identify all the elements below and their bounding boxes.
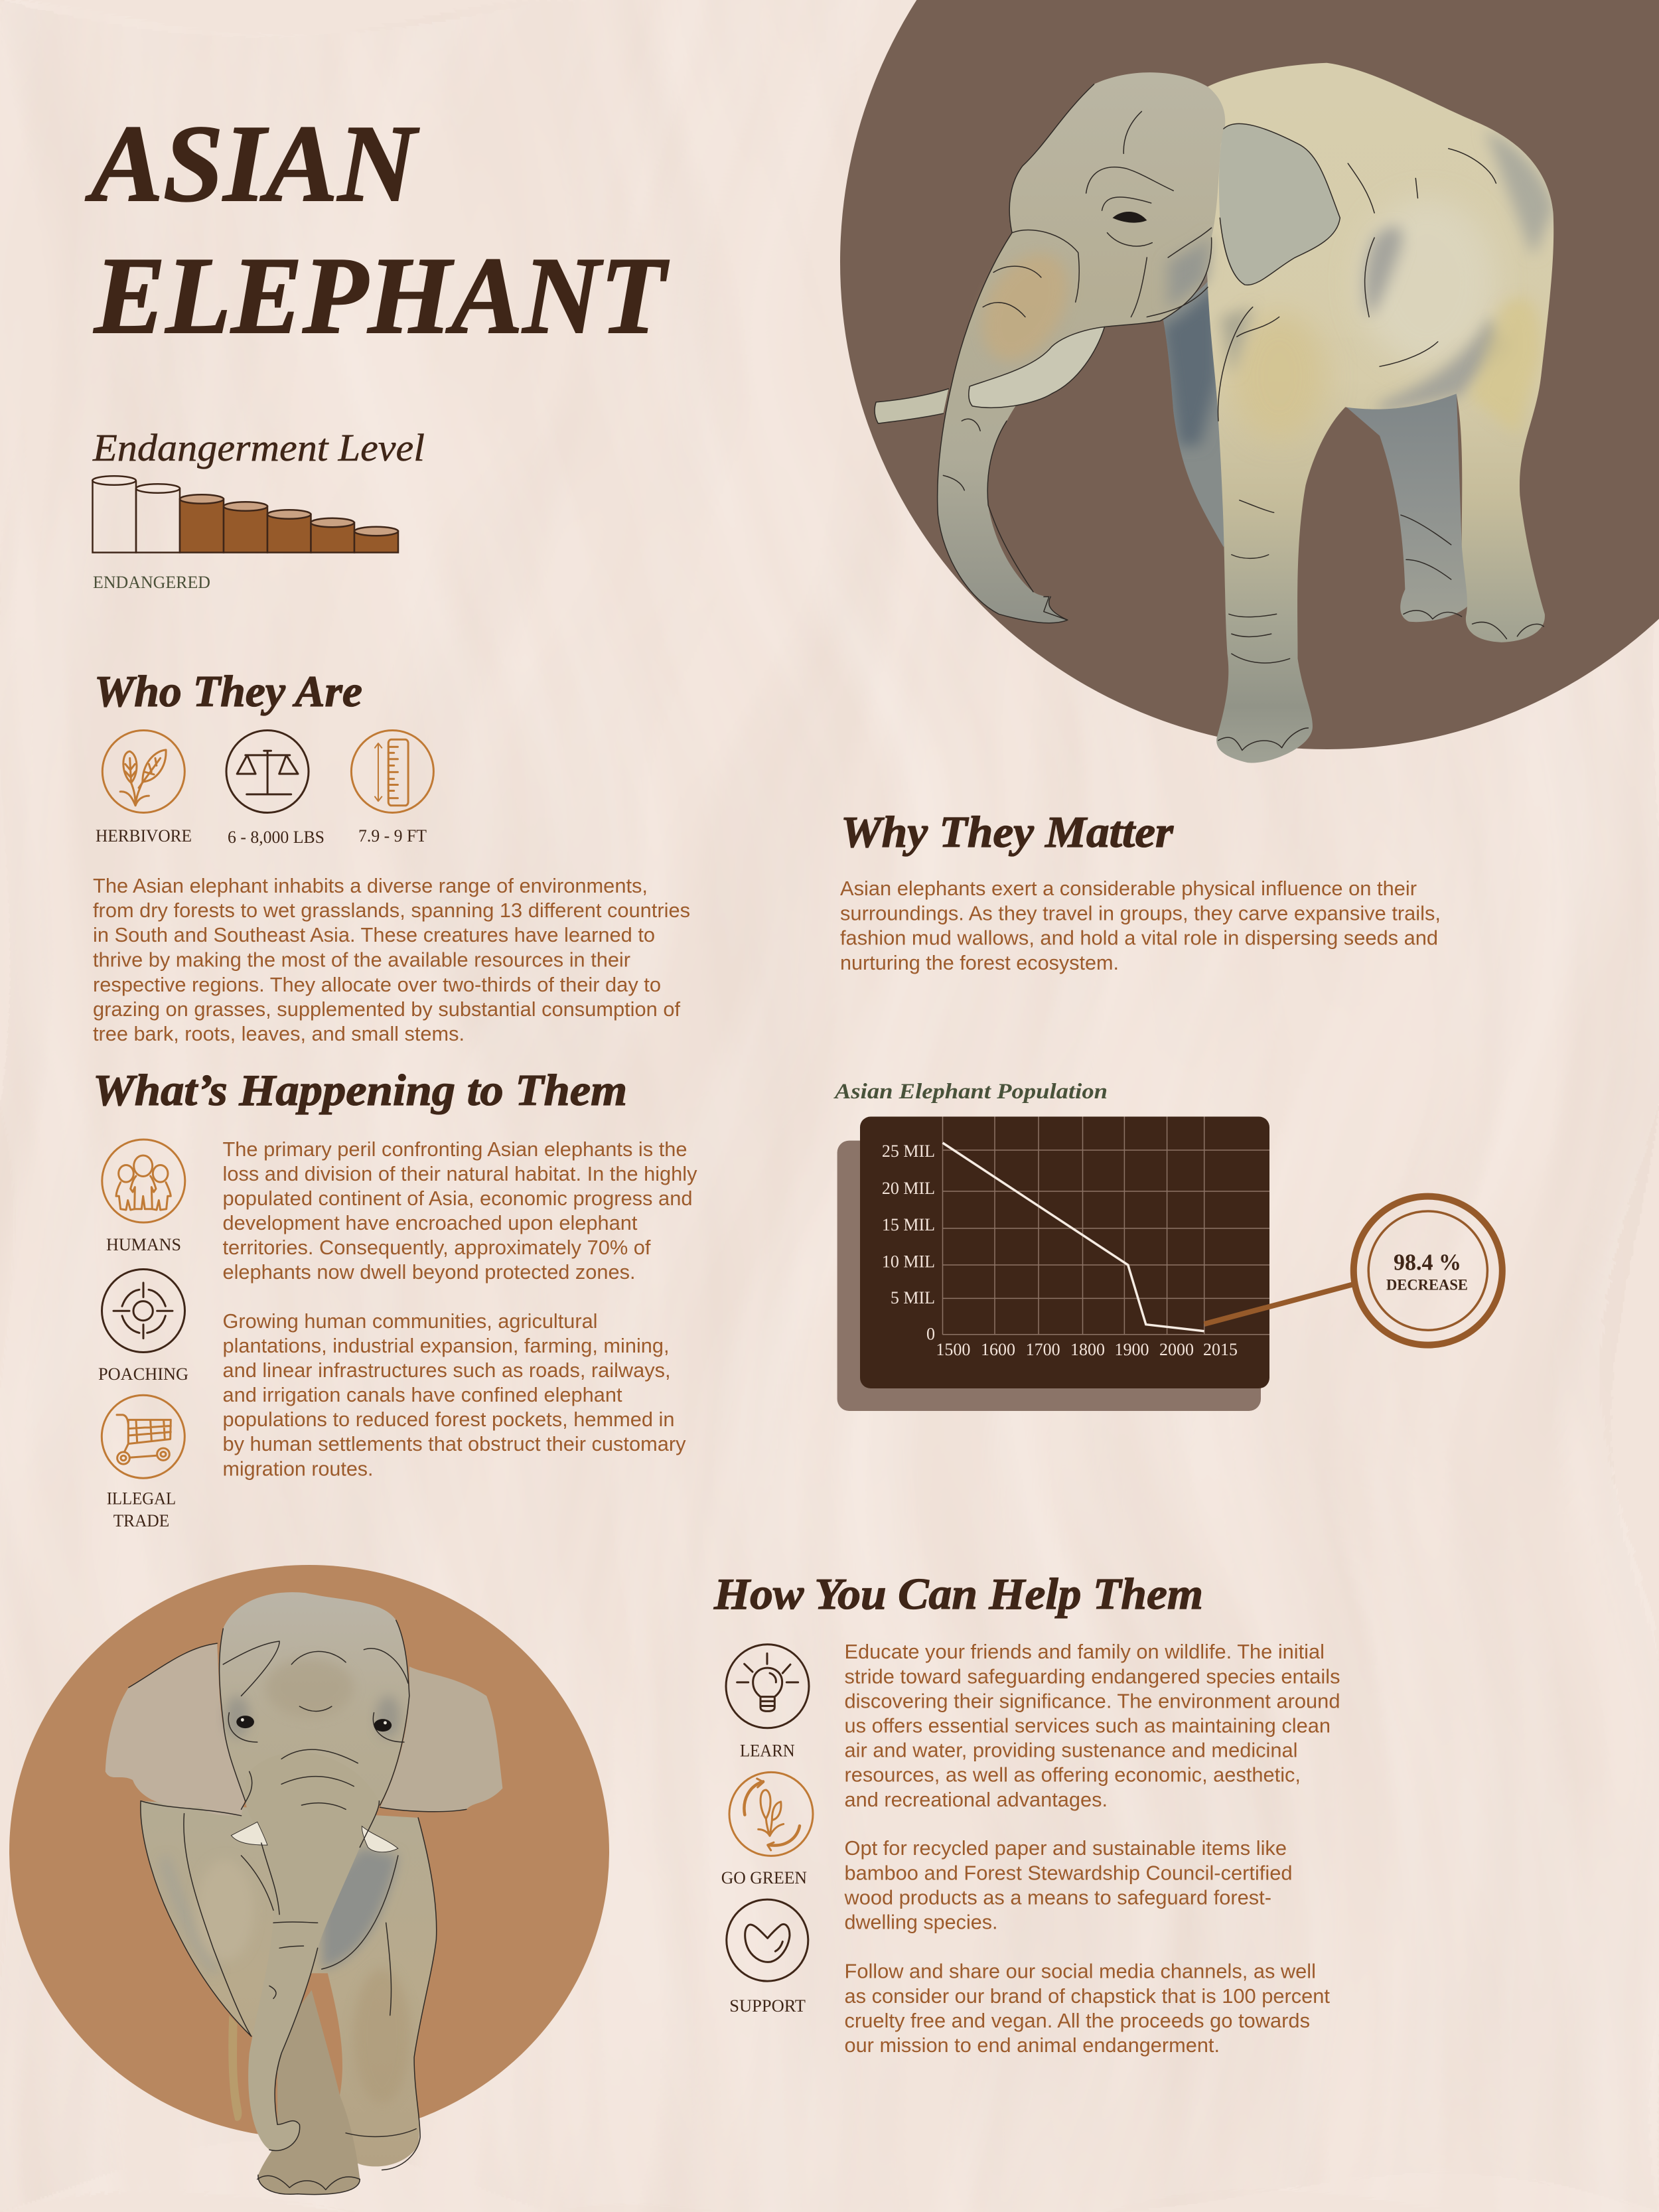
text: who they are body: thrive by making the most of the available resources in their [93,948,630,972]
text: who they are body: in South and Southeast Asia. These creatures have learned to [93,923,655,946]
text: why they matter body: fashion mud wallows, and hold a vital role in dispersing seeds and [840,926,1438,949]
y axis labels [882,1142,935,1344]
label: support: SUPPORT [729,1996,806,2016]
label: learn: LEARN [740,1741,795,1760]
label: herbivore: HERBIVORE [96,826,192,846]
text: what's happening body: populations to reduced forest pockets, hemmed in [223,1408,674,1431]
callout: 98.4% decrease: DECREASE [1386,1277,1468,1293]
title [85,102,669,356]
panel: endangerment level [92,426,425,592]
callout: 98.4% decrease: 98.4 % [1394,1250,1461,1276]
circle: lower elephant backdrop [9,1565,609,2138]
text: why they matter body: nurturing the forest ecosystem. [840,951,1119,974]
x axis labels: 1700 [1026,1340,1060,1359]
text: how you can help body: Follow and share our social media channels, as well [844,1959,1316,1983]
text: what's happening body: The primary peril confronting Asian elephants is the [223,1138,687,1161]
label: humans: HUMANS [106,1235,181,1254]
icon: ruler height [351,730,433,812]
panel: who they are [93,667,690,1045]
title: ASIAN [85,102,419,224]
text: who they are body: respective regions. They allocate over two-thirds of their day to [93,973,661,996]
panel: how you can help them [713,1570,1340,2057]
text: what's happening body: populated continent of Asia, economic progress and [223,1187,693,1210]
y axis labels: 15 MIL [882,1215,935,1234]
text: how you can help body: discovering their significance. The environment around [844,1690,1340,1712]
chart: declining cylinders [92,476,398,552]
text: why they matter body: Asian elephants exert a considerable physical influence on their [840,877,1417,900]
label: poaching: POACHING [98,1364,188,1384]
icon: heart support [727,1899,808,1981]
icon: go green [729,1772,813,1856]
y axis labels: 10 MIL [882,1252,935,1272]
text: what's happening body: by human settlements that obstruct their customary [223,1432,686,1455]
text: how you can help body: resources, as well as offering economic, aesthetic, [844,1763,1301,1787]
heading: Who They Are [94,667,362,716]
x axis labels: 2015 [1203,1340,1238,1359]
text: what's happening body: development have encroached upon elephant [223,1211,638,1234]
text: how you can help body [844,1640,1340,2057]
illustration: front-facing elephant [106,1592,502,2195]
text: what's happening body [223,1138,697,1480]
text: how you can help body: wood products as a means to safeguard forest- [844,1886,1271,1909]
text: why they matter body [840,877,1441,974]
text: who they are body [93,874,690,1045]
text: how you can help body: Educate your friends and family on wildlife. The initial [844,1640,1325,1663]
text: how you can help body: us offers essential services such as maintaining clean [844,1714,1331,1737]
y axis labels: 0 [926,1325,935,1344]
eye [1113,212,1147,223]
heading: How You Can Help Them [713,1570,1203,1619]
label: height: 7.9 - 9 FT [358,826,427,846]
eyes [236,1716,392,1732]
icon: poaching target [102,1269,184,1353]
label: illegal trade: ILLEGAL [107,1489,176,1509]
text: how you can help body: stride toward safeguarding endangered species entails [844,1664,1340,1688]
text: how you can help body: bamboo and Forest Stewardship Council-certified [844,1861,1293,1884]
text: who they are body: The Asian elephant inhabits a diverse range of environments, [93,874,648,897]
label: illegal trade [107,1489,176,1530]
icon: weight scale [226,730,309,812]
text: what's happening body: migration routes. [223,1457,373,1480]
icon: humans [102,1140,185,1222]
label: weight: 6 - 8,000 LBS [228,828,325,847]
text: why they matter body: surroundings. As they travel in groups, they carve expansive trails, [840,901,1441,925]
text: how you can help body: our mission to end animal endangerment. [844,2033,1220,2057]
panel: why they matter [840,808,1441,974]
icon: shopping cart [102,1395,184,1478]
x axis labels: 1600 [981,1340,1015,1359]
icon: light bulb [726,1645,809,1728]
text: how you can help body: dwelling species. [844,1910,998,1934]
text: what's happening body: loss and division of their natural habitat. In the highly [223,1162,697,1185]
y axis labels: 20 MIL [882,1179,935,1198]
icon: herbivore [102,730,184,812]
x axis labels: 1900 [1115,1340,1149,1359]
text: how you can help body: as consider our brand of chapstick that is 100 percent [844,1984,1330,2008]
text: who they are body: from dry forests to wet grasslands, spanning 13 different countries [93,899,690,922]
chart title: Asian Elephant Population [833,1080,1108,1104]
y axis labels: 25 MIL [882,1142,935,1161]
text: what's happening body: Growing human communities, agricultural [223,1309,597,1333]
callout: 98.4% decrease [1354,1197,1502,1345]
x axis labels: 1500 [936,1340,970,1359]
text: how you can help body: air and water, providing sustenance and medicinal [844,1739,1298,1761]
panel: population chart [833,1080,1502,1411]
label: go green: GO GREEN [721,1868,807,1887]
x axis labels: 1800 [1070,1340,1105,1359]
heading: What’s Happening to Them [93,1066,627,1115]
text: who they are body: grazing on grasses, supplemented by substantial consumption of [93,997,680,1021]
text: what's happening body: plantations, industrial expansion, farming, mining, [223,1334,669,1357]
x axis labels [936,1340,1238,1359]
text: who they are body: tree bark, roots, leaves, and small stems. [93,1022,465,1045]
text: what's happening body: and linear infrastructures such as roads, railways, [223,1359,670,1382]
panel: what's happening to them [93,1066,697,1530]
heading: endangerment level: Endangerment Level [92,426,425,469]
text: what's happening body: and irrigation canals have confined elephant [223,1383,622,1406]
chart shadow [837,1141,1261,1411]
text: how you can help body: Opt for recycled paper and sustainable items like [844,1836,1287,1860]
x axis labels: 2000 [1159,1340,1194,1359]
text: what's happening body: elephants now dwell beyond protected zones. [223,1260,636,1284]
y axis labels: 5 MIL [891,1288,935,1307]
arrow: connector to callout [1204,1284,1354,1324]
text: how you can help body: cruelty free and vegan. All the proceeds go towards [844,2009,1310,2032]
label: endangered: ENDANGERED [93,573,210,592]
line chart [860,1116,1269,1388]
label: illegal trade: TRADE [113,1511,169,1530]
title: ELEPHANT [93,234,669,356]
population line [942,1143,1204,1331]
heading: Why They Matter [841,808,1174,857]
text: how you can help body: and recreational advantages. [844,1788,1108,1811]
text: what's happening body: territories. Consequently, approximately 70% of [223,1236,651,1259]
illustration: standing Asian elephant [875,63,1554,763]
circle: top elephant backdrop [840,0,1659,749]
